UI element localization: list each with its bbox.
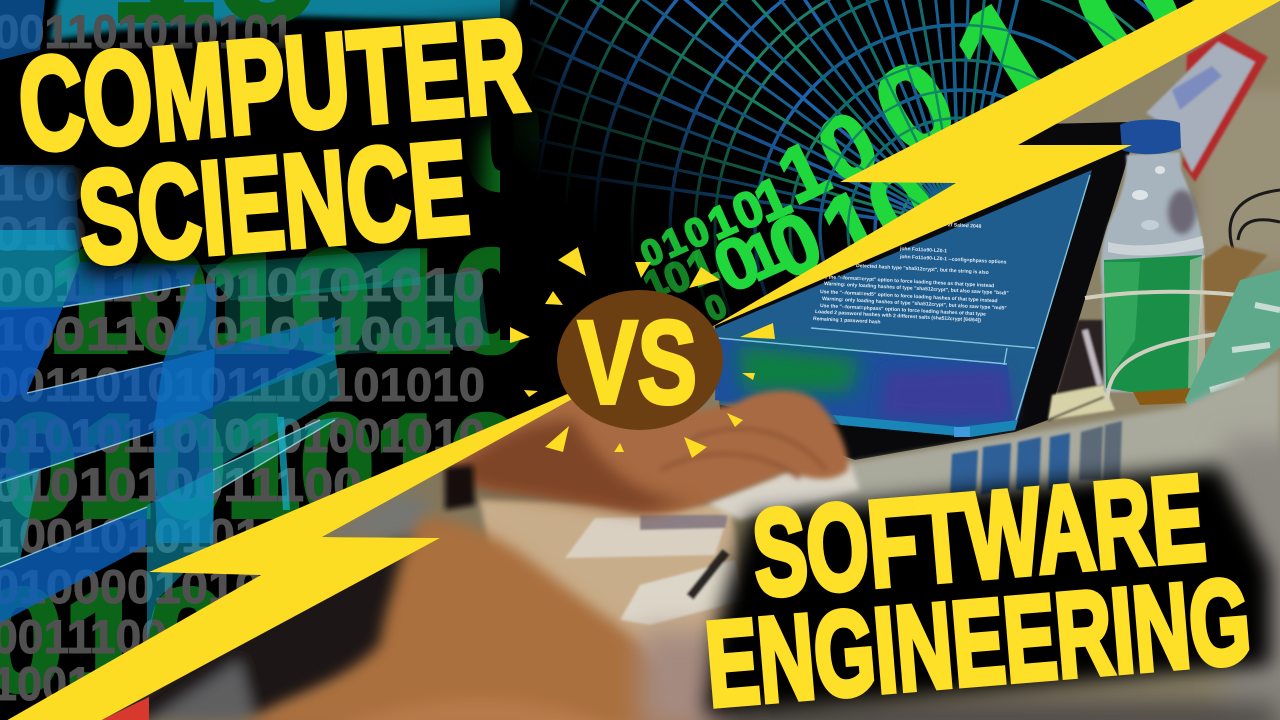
terminal text: Use the "--format=crypt" option to force loading these as that type instead: [818, 274, 994, 289]
glowing green binary digits: 0: [852, 31, 978, 183]
red book corner: [102, 697, 149, 720]
terminal text: [813, 221, 1009, 326]
table surface: [478, 497, 742, 663]
glowing green binary digits: 0: [801, 91, 895, 205]
glowing green binary digits: 0: [678, 208, 716, 258]
grey binary rows: 0101011010101001010: [0, 409, 485, 462]
terminal text: Warning: only loading hashes of type "sha512crypt", but also saw type "bsdi": [824, 281, 1009, 297]
grey binary rows: 0101010011100: [0, 458, 362, 511]
blue translucent ribbons: [0, 0, 490, 640]
windows start icon: [954, 427, 970, 437]
blurred foreground arm: [240, 517, 700, 720]
badge text: VS: [578, 297, 697, 429]
silver wedge under hand: [707, 463, 860, 520]
dark cables: [1230, 190, 1280, 255]
blurred desk items: [640, 440, 1280, 720]
terminal text: Detected hash type "sha512crypt", but the string is also: [856, 263, 989, 276]
terminal text: Use the "--format=md5" option to force loading hashes of that type instead: [820, 289, 998, 304]
terminal text: Loaded 2 password hashes with 2 different salts (sha512crypt [64/64]): [815, 309, 981, 324]
spark triangles around badge: [510, 247, 775, 458]
glowing green binary digits: 0: [702, 219, 772, 309]
grey binary rows: 0011101010101010: [0, 258, 485, 311]
VS badge: [557, 290, 723, 430]
grey binary rows: 0011010101110101010: [0, 358, 485, 411]
lower bolt: [4, 392, 574, 720]
glowing green binary digits: 0: [847, 138, 959, 276]
glowing green binary digits: 1: [656, 220, 692, 266]
panel: digital grid and glowing binary: [500, 0, 1195, 340]
title shadow: computer science: [15, 15, 545, 275]
grey binary rows: 001101010101: [0, 5, 294, 58]
title: software engineering: [701, 449, 1255, 720]
glowing green binary digits: 1: [764, 123, 842, 221]
glowing green binary digits: 0: [724, 179, 772, 241]
glowing green binary digits: 0: [755, 193, 835, 297]
glowing green binary digits: 1: [679, 238, 725, 298]
big green digits: 0: [462, 57, 543, 219]
blurred dark hair: [100, 495, 440, 720]
glowing green binary digits: 1: [638, 261, 674, 307]
terminal text: Use the "--format=phpass" option to force loading hashes of that type: [820, 303, 986, 318]
glowing green binary digits: 1: [745, 164, 799, 234]
big green digits: 0101010: [3, 385, 523, 547]
laptop monitor: [712, 122, 1132, 460]
terminal text: Pad Md5 2f Salted 2048: [926, 221, 982, 230]
white cables: [1085, 292, 1245, 403]
grid overlay on digits: [820, 0, 1117, 240]
terminal text: john Fo11o90-LZ0-1 --config=phpass options: [899, 254, 1007, 266]
hand on mouse: [449, 390, 848, 514]
grey binary rows: 1001101010110010: [0, 307, 485, 360]
glowing green binary digits: 0: [657, 251, 697, 303]
grid fade: [500, 0, 1020, 340]
upper bolt: [712, 0, 1280, 327]
terminal text: john Fo11o90-LZ0-1: [899, 246, 947, 254]
water bottle: [1101, 119, 1205, 405]
glowing green binary digits: 1: [807, 169, 897, 283]
glowing green binary digits: 1: [733, 217, 793, 295]
grey binary rows: [0, 5, 485, 710]
red laptop behind: [1146, 32, 1268, 182]
badge circle: [557, 290, 723, 430]
glowing green binary digits: [640, 0, 1178, 320]
food wrapper: [1203, 245, 1268, 335]
big green digits: [0, 0, 543, 720]
glowing green binary digits: 1: [701, 195, 743, 249]
items beside bottle: [1048, 320, 1115, 420]
title shadow: software engineering: [705, 465, 1270, 715]
silver laptop on right: [758, 270, 1280, 518]
terminal text: Remaining 1 password hash: [813, 316, 881, 326]
glowing green binary digits: 0: [700, 287, 732, 329]
grid lines: [530, 0, 1195, 326]
terminal text: Warning: only loading hashes of type "sha512crypt", but also saw type "md5": [822, 296, 1007, 312]
title: computer science: SCIENCE: [73, 113, 474, 292]
big green digits: 101010: [48, 220, 532, 382]
title: computer science: [13, 0, 533, 292]
glowing green binary digits: 0: [635, 229, 669, 275]
dark shadow behind hand: [445, 465, 475, 510]
top teal band: [50, 0, 520, 40]
notepaper and pen: [565, 515, 745, 625]
